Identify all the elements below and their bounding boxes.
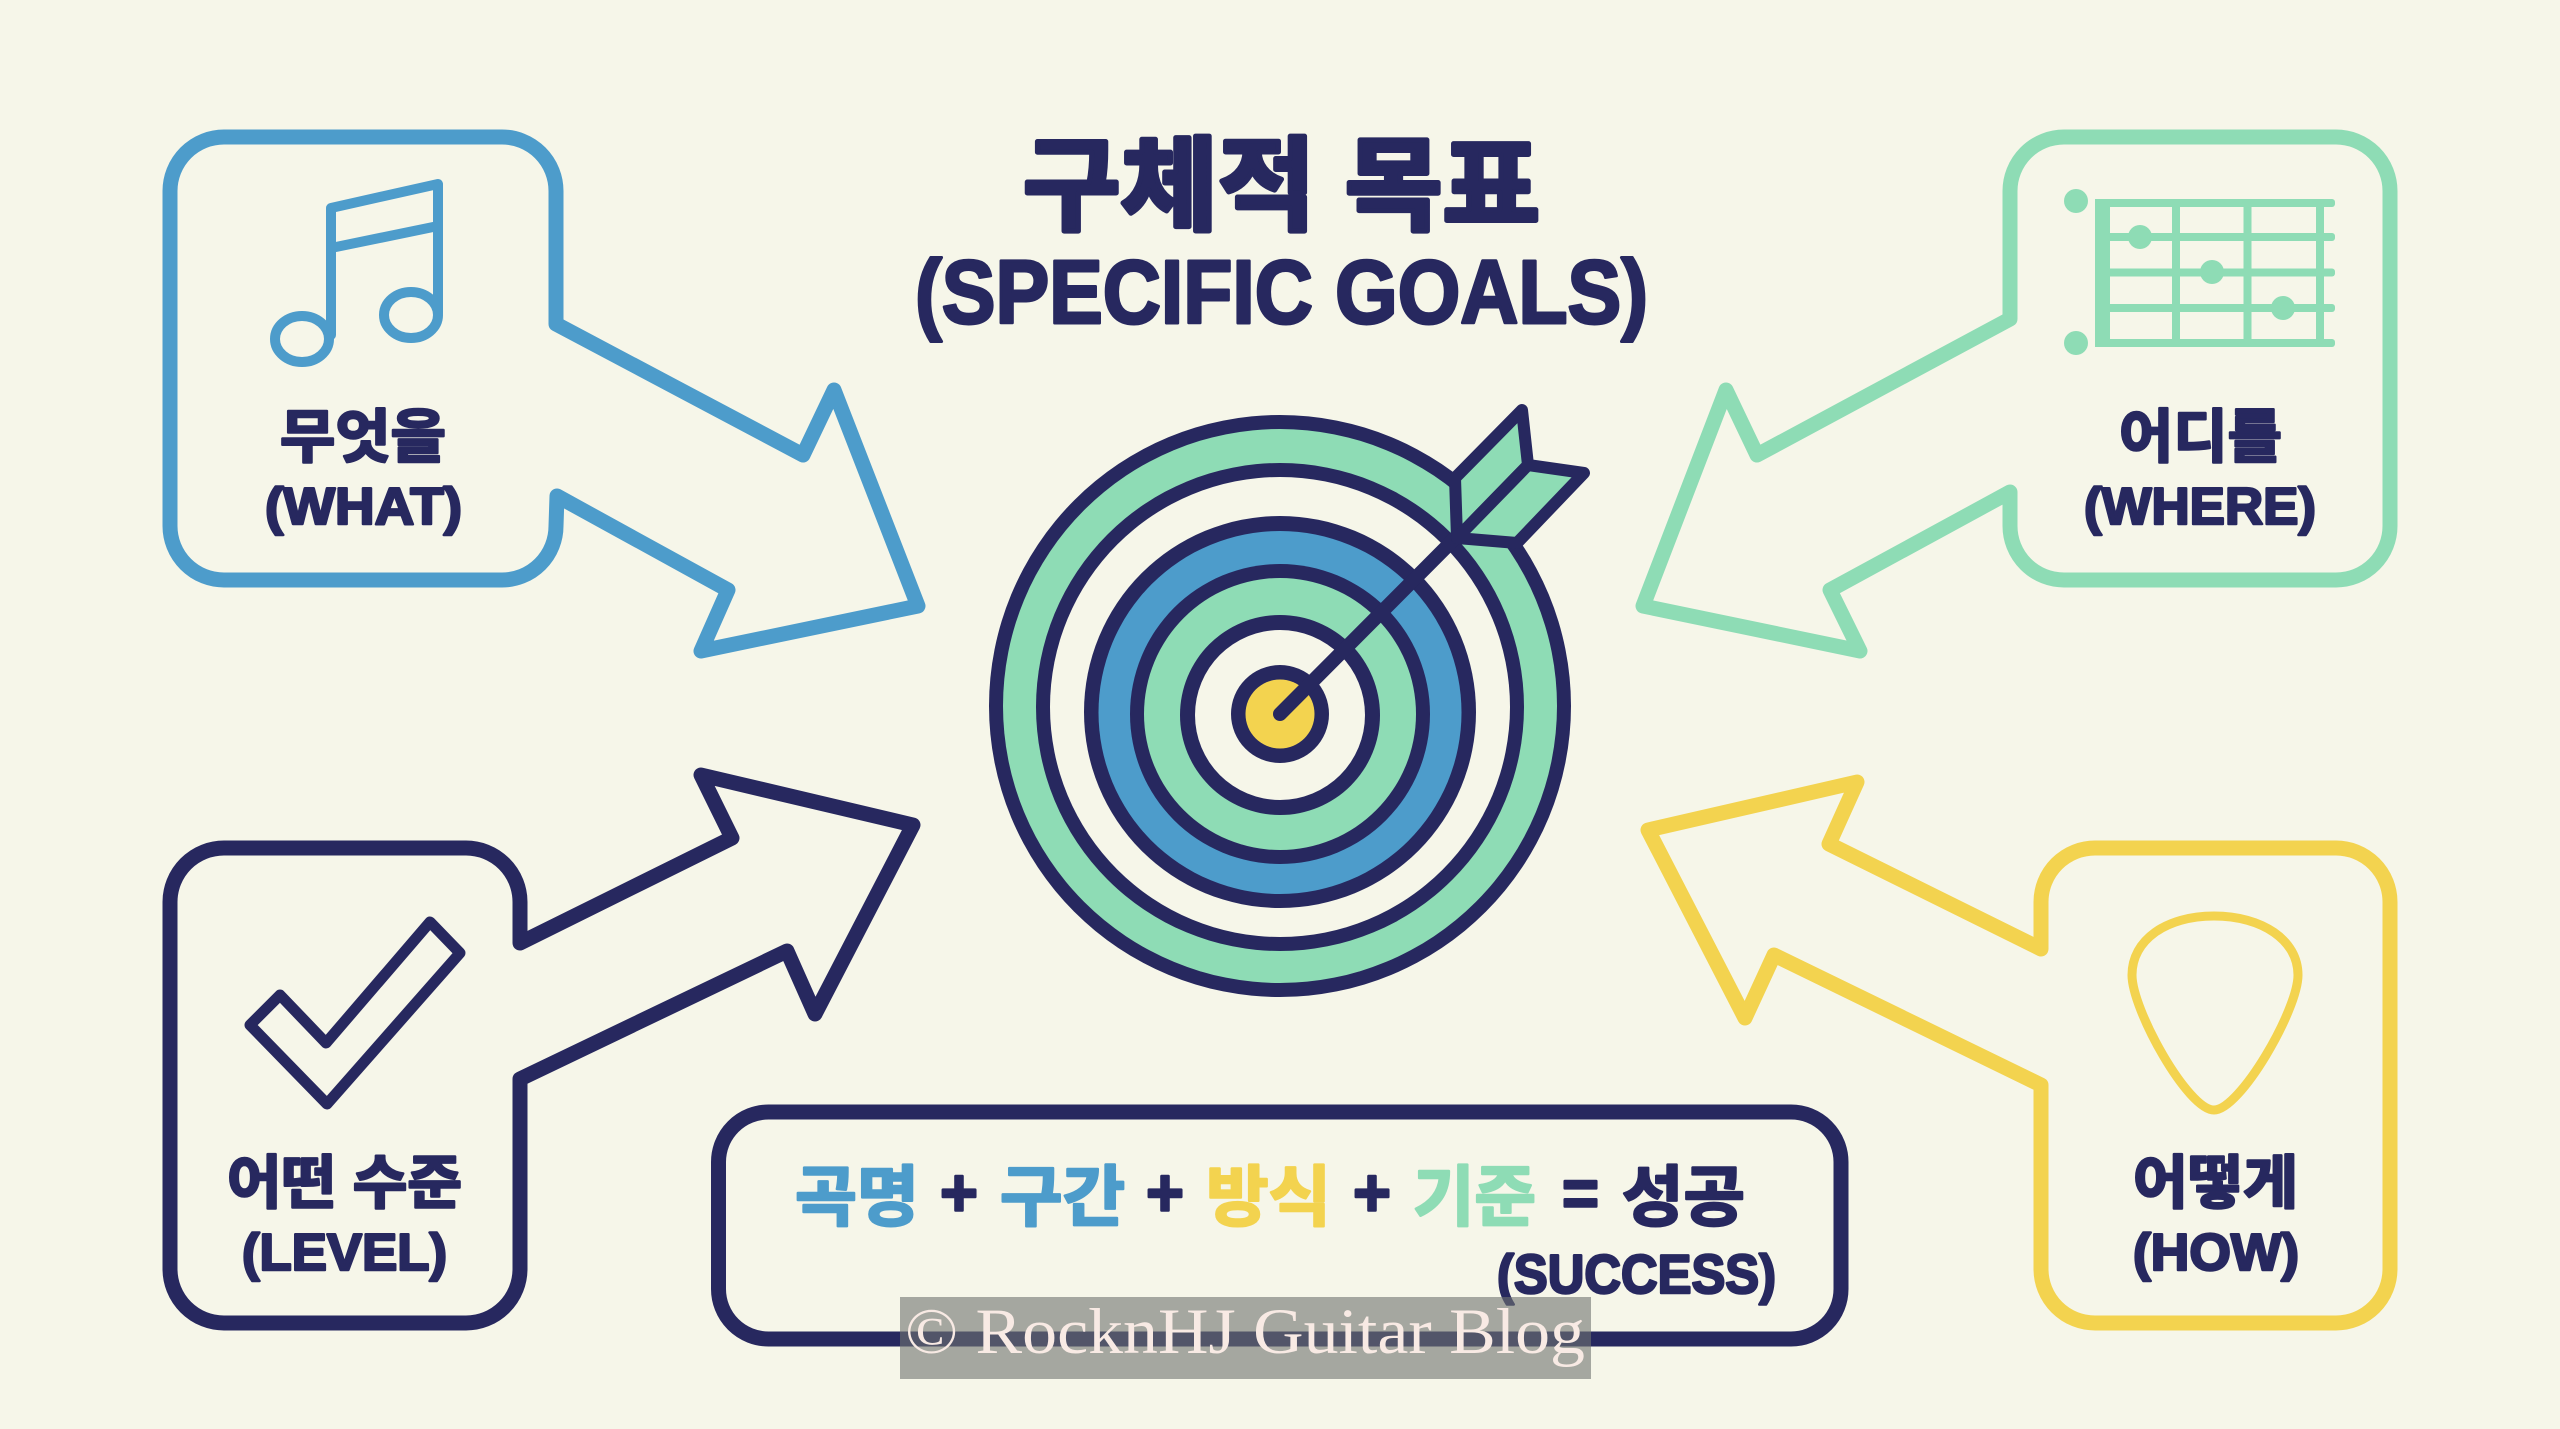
title: Korean heading: 구체적 목표 [1023,130,1540,244]
formula box [718,1112,1841,1339]
panel: what [170,137,918,651]
title [915,130,1648,343]
watermark [900,1296,1591,1379]
formula: term criterion: 기준 [1413,1160,1536,1234]
label: how Korean: 어떻게 [2133,1151,2298,1216]
watermark text: © RocknHJ Guitar Blog [905,1296,1585,1368]
label: where Korean: 어디를 [2119,405,2282,470]
formula: result success: 성공 [1622,1160,1745,1234]
panel: how [1648,782,2390,1323]
title: English subheading: (SPECIFIC GOALS) [915,243,1648,343]
formula: plus: + [940,1155,978,1231]
icon: guitar pick [2132,916,2298,1110]
arrow: level box pointing to target [170,775,913,1323]
label: how English: (HOW) [2133,1224,2299,1282]
formula: term song title: 곡명 [795,1160,919,1234]
icon: dart fletching [1455,410,1584,543]
label: level English: (LEVEL) [242,1224,447,1282]
icon: chord diagram [2064,189,2335,355]
chart: target with arrow [989,410,1584,997]
arrow: what box pointing to target [170,137,918,651]
formula: equals: = [1562,1155,1599,1231]
target rings [989,415,1571,997]
formula: term method: 방식 [1206,1160,1331,1234]
panel: level [170,775,913,1323]
formula: plus: + [1353,1155,1391,1231]
arrow: how box pointing to target [1648,782,2390,1323]
formula: English success: (SUCCESS) [1497,1243,1776,1305]
icon: check mark [250,922,460,1104]
label: level Korean: 어떤 수준 [227,1151,462,1216]
formula: plus: + [1146,1155,1184,1231]
formula: term section: 구간 [1000,1160,1125,1234]
icon: music notes [275,184,438,362]
label: what Korean: 무엇을 [280,405,446,470]
arrow: where box pointing to target [1643,137,2390,651]
label: where English: (WHERE) [2084,478,2316,536]
watermark background [900,1297,1591,1379]
arrow: dart shaft [1280,465,1528,714]
label: what English: (WHAT) [265,478,462,536]
panel: where [1643,137,2390,651]
callout: success formula [718,1112,1841,1339]
